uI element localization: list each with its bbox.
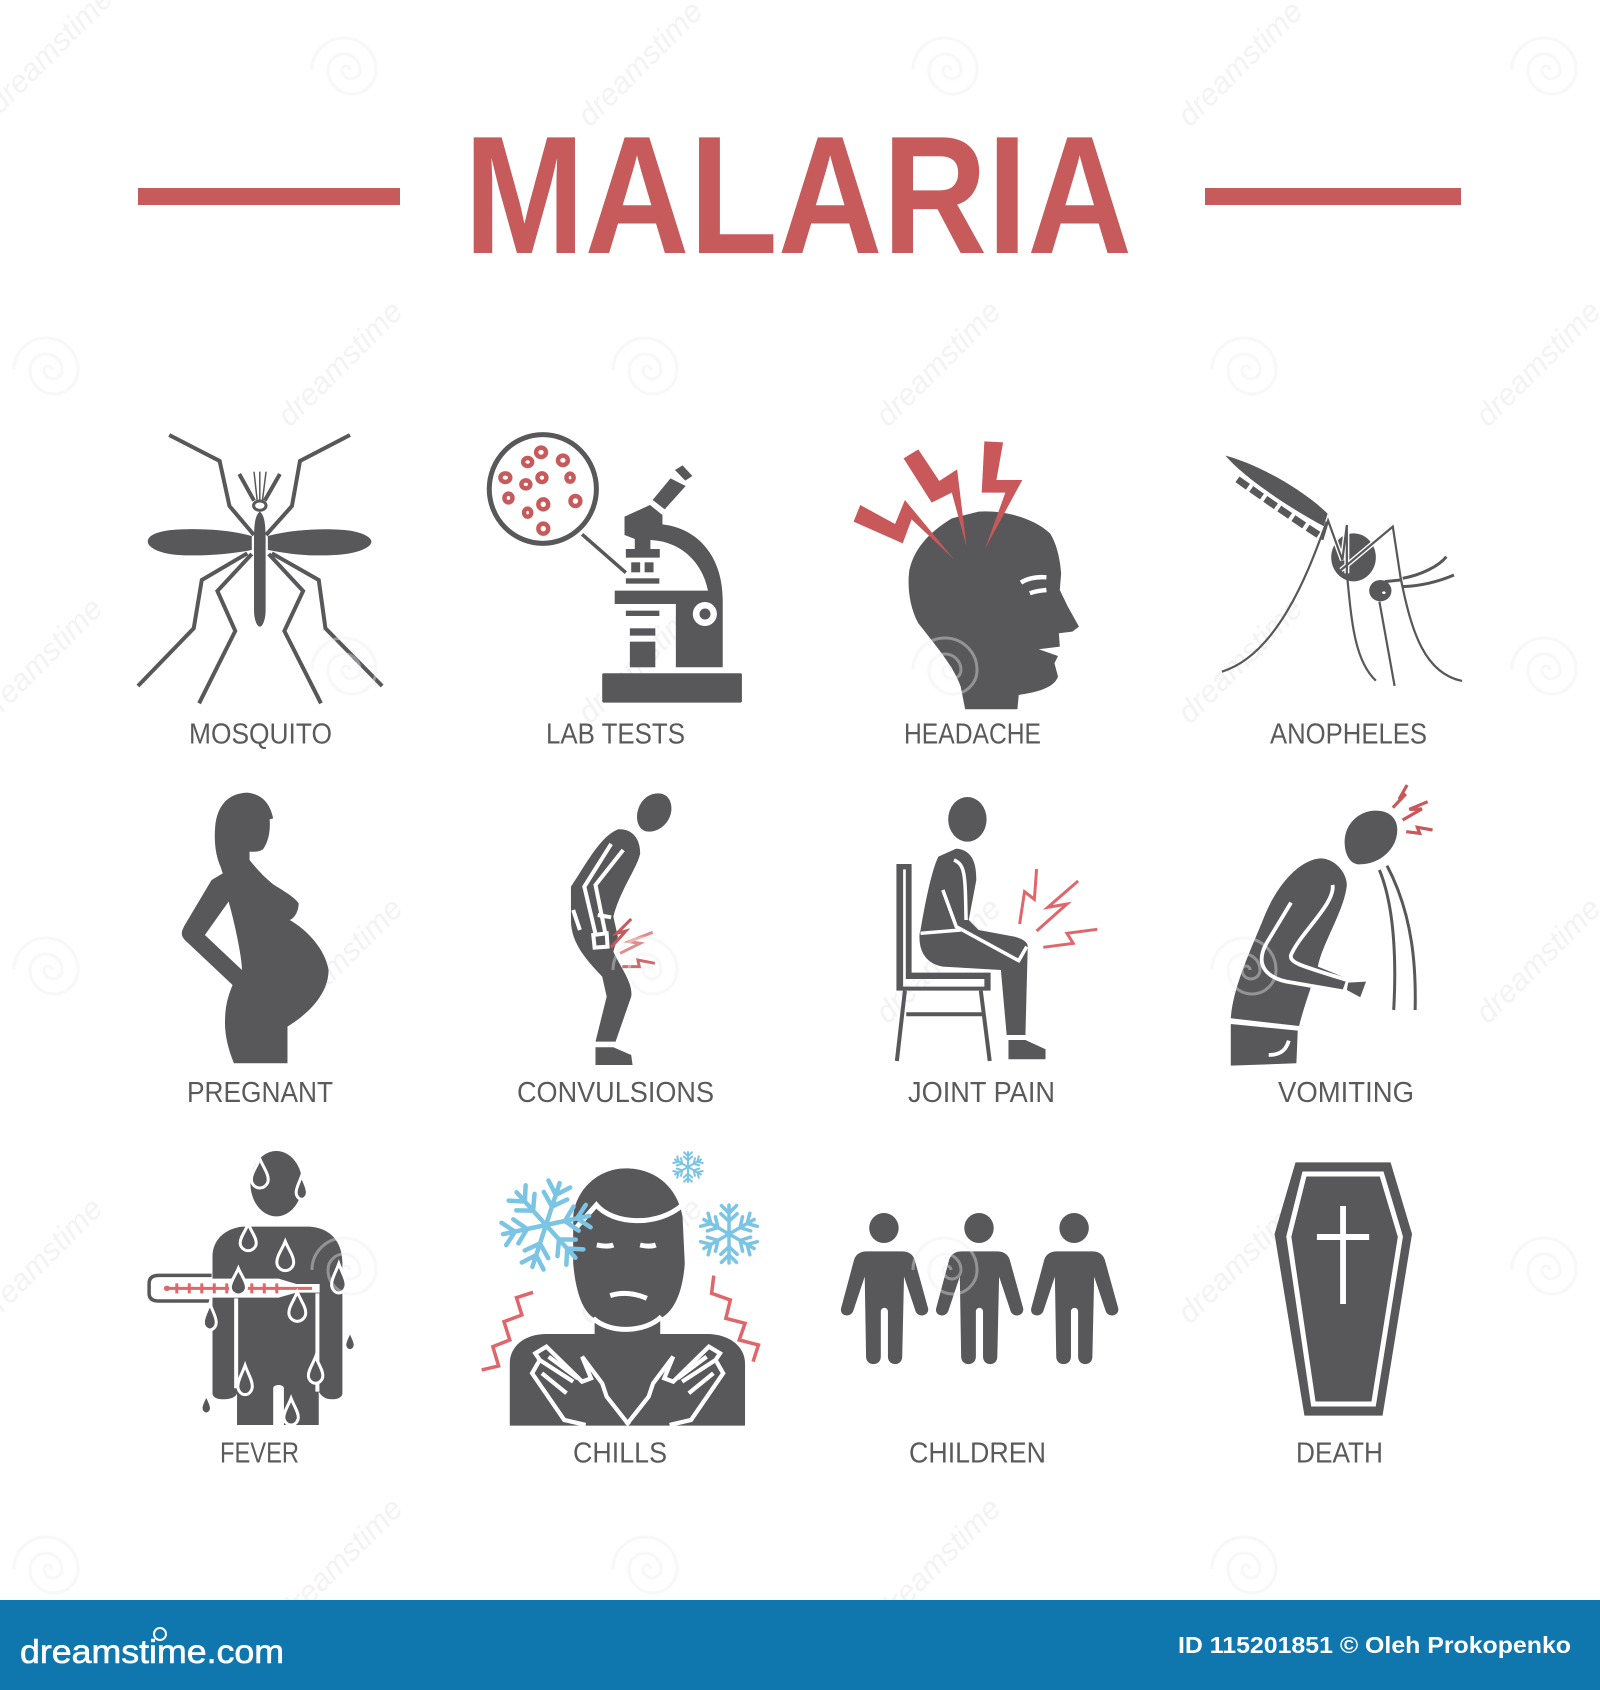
hairline and neck	[574, 1205, 683, 1329]
hand	[1347, 982, 1366, 997]
mosquito body	[254, 512, 266, 627]
icon: vomiting	[1231, 785, 1433, 1066]
pain bolts	[1393, 785, 1433, 833]
mosquito wings	[148, 529, 371, 555]
arm outline	[573, 844, 623, 948]
vomit streams	[1379, 866, 1415, 1010]
icon: convulsions	[571, 793, 671, 1065]
head	[1345, 811, 1397, 864]
abdomen underside	[1237, 479, 1322, 537]
shoe	[1008, 1040, 1046, 1059]
magnifier pointer line	[582, 534, 626, 573]
magnifier lens with cells	[489, 435, 596, 543]
legs and palps	[1222, 521, 1462, 686]
arm gaps	[236, 1293, 317, 1392]
footer band	[0, 1600, 1600, 1690]
footer logo: dreamstime.com: dreamstime.com	[20, 1633, 284, 1670]
icon: chills	[482, 1152, 758, 1426]
coffin inner outline	[1289, 1174, 1400, 1404]
cross	[1317, 1206, 1369, 1304]
pain bolts	[611, 919, 655, 967]
child 2	[936, 1213, 1023, 1364]
closed eyes and mouth	[597, 1245, 656, 1298]
arm outline	[921, 860, 1027, 961]
footer credit: ID 115201851 © Oleh Prokopenko	[1178, 1632, 1571, 1658]
label: CHILDREN: CHILDREN	[909, 1438, 1046, 1470]
icon: anopheles mosquito	[1222, 456, 1462, 686]
head	[250, 1151, 302, 1216]
icon: headache	[854, 441, 1079, 709]
child 1	[841, 1213, 928, 1364]
icon: mosquito	[138, 435, 382, 703]
label: CHILLS: CHILLS	[573, 1438, 667, 1470]
pain bolts	[854, 441, 1022, 559]
snowflake medium	[700, 1205, 758, 1263]
microscope knob	[693, 602, 717, 626]
snowflake small	[673, 1152, 703, 1182]
label: VOMITING: VOMITING	[1278, 1077, 1414, 1109]
shiver zigzags	[482, 1276, 758, 1370]
seated body	[919, 849, 1028, 1035]
eye	[1021, 577, 1046, 593]
lower body	[1231, 1024, 1298, 1066]
sweat drops	[201, 1159, 355, 1425]
coffin shape	[1275, 1162, 1412, 1416]
icon: lab tests microscope	[489, 435, 742, 703]
child 3	[1031, 1213, 1118, 1364]
head and torso	[510, 1168, 745, 1426]
snowflake large	[490, 1169, 602, 1281]
abdomen	[1225, 456, 1329, 527]
head	[637, 793, 671, 832]
title: MALARIA: MALARIA	[464, 101, 1132, 289]
label: HEADACHE: HEADACHE	[904, 718, 1041, 750]
icon: joint pain	[896, 797, 1097, 1061]
label: LAB TESTS: LAB TESTS	[546, 718, 685, 750]
label: CONVULSIONS: CONVULSIONS	[517, 1077, 714, 1109]
title rule right	[1205, 188, 1461, 205]
crossed hands	[532, 1347, 723, 1425]
icon: fever	[149, 1151, 355, 1425]
mosquito head	[1369, 580, 1391, 601]
silhouette	[182, 793, 329, 1063]
body	[212, 1227, 342, 1425]
microscope knob centre	[700, 608, 710, 620]
label: MOSQUITO: MOSQUITO	[189, 718, 332, 750]
label: ANOPHELES: ANOPHELES	[1270, 718, 1427, 750]
thermometer	[149, 1275, 320, 1301]
microscope body	[602, 465, 742, 703]
label: PREGNANT: PREGNANT	[187, 1077, 333, 1109]
head	[948, 797, 987, 842]
icon: coffin	[1275, 1162, 1412, 1416]
pain bolts	[1020, 869, 1097, 947]
label: DEATH: DEATH	[1296, 1438, 1383, 1470]
mosquito head	[254, 501, 266, 510]
icon: children	[841, 1213, 1118, 1364]
shoe	[596, 1047, 633, 1065]
chair	[896, 864, 991, 991]
label: JOINT PAIN: JOINT PAIN	[908, 1077, 1055, 1109]
icon: pregnant woman	[182, 793, 329, 1063]
arm outline	[1262, 885, 1347, 1055]
label: FEVER: FEVER	[220, 1438, 299, 1470]
head silhouette	[909, 511, 1079, 709]
chair legs	[897, 991, 990, 1061]
thorax	[1331, 533, 1376, 581]
upper body	[1231, 858, 1347, 1026]
title rule left	[138, 188, 400, 205]
body	[571, 829, 640, 1042]
mosquito legs	[138, 435, 382, 703]
